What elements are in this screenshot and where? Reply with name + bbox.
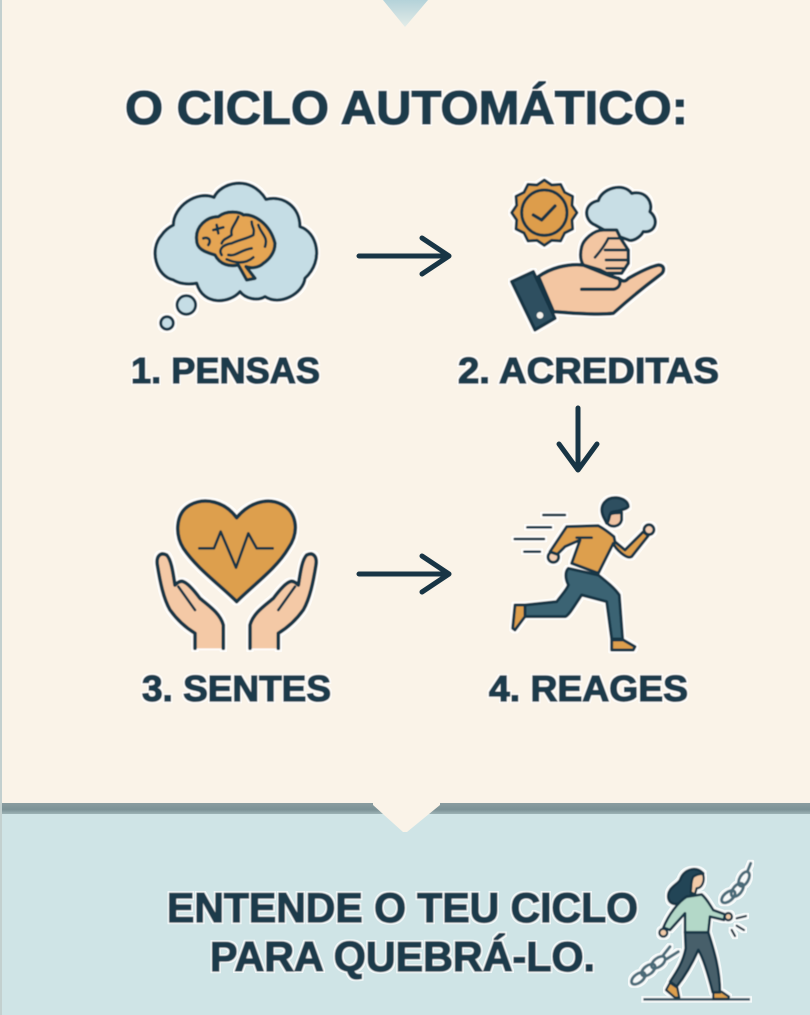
arrow: acreditas to reages — [559, 408, 597, 470]
ground line — [643, 995, 750, 1003]
fist — [581, 230, 628, 273]
lower broken chain — [629, 947, 678, 987]
face — [691, 874, 704, 894]
open hand — [538, 265, 664, 314]
shock marks — [732, 916, 746, 936]
badge — [512, 180, 577, 245]
brain — [197, 212, 275, 280]
trousers — [670, 932, 720, 992]
panel: cream background — [0, 0, 810, 806]
cuff — [512, 272, 555, 330]
thought bubbles — [161, 296, 196, 329]
label: 1. pensas: 1. PENSAS — [131, 350, 320, 391]
label: 4. reages: 4. REAGES — [489, 668, 688, 709]
shoes — [513, 605, 635, 650]
cloud — [155, 183, 317, 301]
heart — [178, 501, 295, 602]
left hand — [157, 554, 223, 648]
top notch triangle — [383, 0, 428, 27]
title: O CICLO AUTOMÁTICO: — [125, 81, 688, 134]
sweater — [663, 894, 725, 932]
icon: hand holding fist and cloud with badge — [512, 180, 664, 330]
shoes — [666, 983, 729, 999]
icon: running person — [513, 498, 654, 650]
closing message — [167, 884, 638, 980]
legs — [525, 568, 623, 639]
head — [602, 498, 628, 526]
closing message: PARA QUEBRÁ-LO. — [210, 933, 595, 980]
icon: thought cloud with brain — [155, 183, 317, 329]
label: 2. acreditas: 2. ACREDITAS — [458, 350, 719, 391]
icon: woman breaking chains — [629, 863, 752, 999]
closing message: ENTENDE O TEU CICLO — [167, 884, 638, 931]
torso — [550, 526, 648, 573]
hands — [659, 913, 732, 937]
arrow: pensas to acreditas — [359, 238, 449, 274]
icon: heart held by hands — [157, 501, 316, 648]
label: 3. sentes: 3. SENTES — [142, 668, 331, 709]
lower notch triangle — [373, 802, 440, 832]
speed lines — [515, 515, 565, 552]
arrow: sentes to reages — [359, 556, 449, 592]
fists — [548, 525, 654, 562]
cloud — [587, 187, 655, 240]
upper broken chain — [719, 863, 752, 905]
hair — [668, 869, 703, 904]
right hand — [250, 554, 316, 648]
